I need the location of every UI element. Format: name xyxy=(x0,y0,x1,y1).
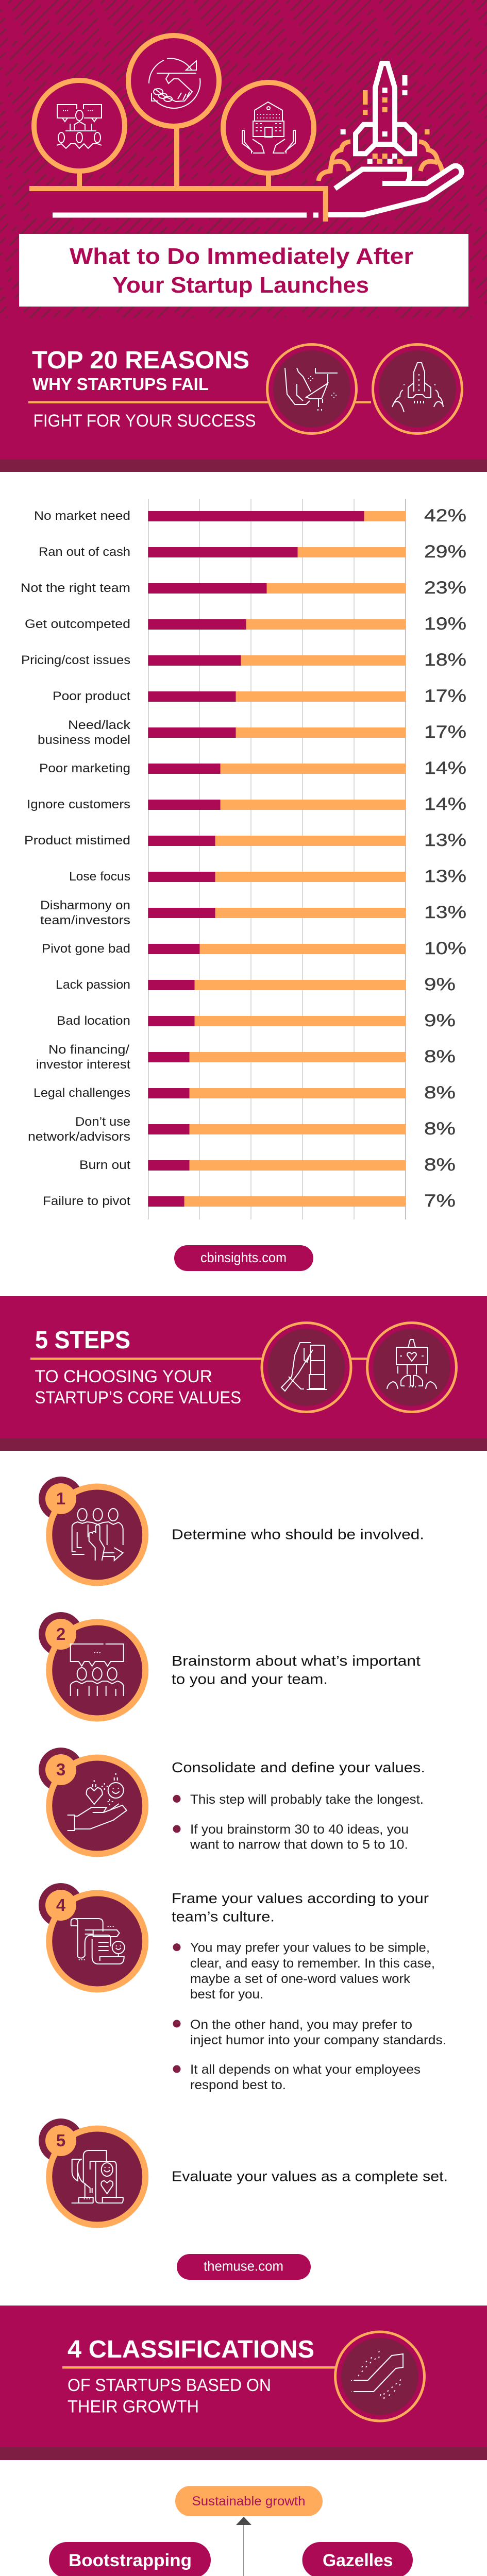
panel: top 20 reasons heading xyxy=(0,318,487,472)
bullet list: inject humor into your company standards. xyxy=(190,2033,446,2047)
row: Bad location 9% xyxy=(57,1011,456,1030)
row: No financing/investor interest 8% xyxy=(36,1043,456,1072)
row: Product mistimed 13%: 13% xyxy=(424,831,466,850)
title xyxy=(19,234,468,307)
row: Legal challenges 8% xyxy=(33,1083,456,1103)
row: Disharmony on team/investors 13% xyxy=(40,899,466,927)
step 1: determine who should be involved xyxy=(39,1477,424,1583)
row: Ran out of cash 29%: 29% xyxy=(424,542,466,562)
row: Get outcompeted 19%: Get outcompeted xyxy=(25,617,130,631)
row: Legal challenges 8%: Legal challenges xyxy=(33,1086,130,1100)
quadrant: bootstrapping xyxy=(47,2542,211,2576)
row: Disharmony on team/investors 13%: 13% xyxy=(424,903,466,922)
step 3: consolidate and define values xyxy=(39,1748,425,1854)
panel: 5 steps heading: TO CHOOSING YOUR xyxy=(35,1367,212,1386)
bullet list xyxy=(173,1941,446,2092)
icon: core values board with heart xyxy=(367,1323,457,1412)
row: No market need 42%: No market need xyxy=(34,509,130,523)
step 3: consolidate and define values: Consolidate and define your values. xyxy=(172,1759,425,1775)
row: Product mistimed 13% xyxy=(24,831,466,850)
row: Lack passion 9%: 9% xyxy=(424,975,456,994)
icon: team meeting with speech bubbles xyxy=(57,105,102,148)
row: Ignore customers 14% xyxy=(27,794,466,814)
source pill: cbinsights.com: cbinsights.com xyxy=(200,1250,287,1265)
row: Burn out 8%: Burn out xyxy=(79,1158,130,1172)
row: Poor marketing 14%: 14% xyxy=(424,758,466,778)
row: Failure to pivot 7% xyxy=(43,1191,456,1211)
panel: 4 classifications heading: OF STARTUPS BASED ON xyxy=(68,2376,271,2395)
icon: value scrolls xyxy=(71,1919,125,1964)
chart grid lines xyxy=(148,499,406,1219)
title: What to Do Immediately After xyxy=(70,244,413,269)
row: Lack passion 9%: Lack passion xyxy=(56,978,130,992)
row: Burn out 8% xyxy=(79,1155,456,1175)
source pill: cbinsights.com xyxy=(174,1245,313,1271)
row: Ignore customers 14%: Ignore customers xyxy=(27,798,130,811)
quadrant: gazelles: Gazelles xyxy=(323,2551,393,2570)
icon: trophy and scroll xyxy=(72,2150,123,2203)
row: Get outcompeted 19%: 19% xyxy=(424,614,466,634)
panel: 4 classifications heading: 4 CLASSIFICATIONS xyxy=(68,2336,314,2363)
row: No market need 42%: 42% xyxy=(424,506,466,526)
row: Poor marketing 14%: Poor marketing xyxy=(39,761,130,775)
bullet list: This step will probably take the longest. xyxy=(190,1792,424,1807)
bullet list: You may prefer your values to be simple, xyxy=(190,1941,430,1955)
illustration: three icon circles on a branching stem xyxy=(29,36,328,218)
row: Disharmony on team/investors 13%: team/investors xyxy=(40,913,130,927)
icon: team sharing one speech bubble xyxy=(71,1644,124,1696)
row: Poor marketing 14% xyxy=(39,758,466,778)
axis label: sustainable growth: Sustainable growth xyxy=(192,2494,305,2509)
step 2: brainstorm: to you and your team. xyxy=(172,1671,328,1687)
bullet list xyxy=(173,1792,424,1852)
bullet list: want to narrow that down to 5 to 10. xyxy=(190,1838,408,1852)
row: Not the right team 23%: 23% xyxy=(424,578,466,598)
icon: hand with pen xyxy=(267,344,357,434)
bar chart: top 20 reasons startups fail xyxy=(21,499,466,1219)
row: Failure to pivot 7%: 7% xyxy=(424,1191,456,1211)
bullet list: If you brainstorm 30 to 40 ideas, you xyxy=(190,1822,409,1837)
step 2: brainstorm: Brainstorm about what’s important xyxy=(172,1653,421,1669)
bullet list: respond best to. xyxy=(190,2078,286,2092)
row: Poor product 17% xyxy=(53,686,466,706)
row: No market need 42% xyxy=(34,506,466,526)
icon: upward growth arrow xyxy=(335,2332,425,2421)
step 4: frame values: 4 xyxy=(56,1895,66,1914)
icon: hand stacking blocks xyxy=(262,1323,351,1412)
row: Pivot gone bad 10%: Pivot gone bad xyxy=(42,942,130,956)
row: Pivot gone bad 10%: 10% xyxy=(424,939,466,958)
step 3: consolidate and define values: 3 xyxy=(56,1760,65,1779)
panel: 5 steps heading: 5 STEPS xyxy=(35,1327,130,1354)
row: Product mistimed 13%: Product mistimed xyxy=(24,834,130,848)
row: Not the right team 23% xyxy=(21,578,466,598)
step 5: evaluate values xyxy=(39,2119,448,2225)
row: Ran out of cash 29% xyxy=(39,542,466,562)
axis label: sustainable growth xyxy=(175,2486,323,2516)
title: Your Startup Launches xyxy=(112,273,369,298)
step 4: frame values xyxy=(39,1883,446,2092)
panel: top 20 reasons heading: WHY STARTUPS FAIL xyxy=(32,375,209,394)
row: Don't use network/advisors 8%: network/advisors xyxy=(28,1130,130,1144)
row: Lack passion 9% xyxy=(56,975,456,994)
step 1: determine who should be involved: Determine who should be involved. xyxy=(172,1526,424,1543)
row: Bad location 9%: Bad location xyxy=(57,1014,130,1028)
row: Pricing/cost issues 18% xyxy=(21,650,466,670)
icon: people raising a hand xyxy=(72,1509,123,1561)
row: Ran out of cash 29%: Ran out of cash xyxy=(39,545,130,559)
bullet list: best for you. xyxy=(190,1987,263,2002)
row: No financing/investor interest 8%: 8% xyxy=(424,1047,456,1066)
quadrant: bootstrapping: Bootstrapping xyxy=(69,2551,192,2570)
step 2: brainstorm: 2 xyxy=(56,1624,65,1643)
bullet list: maybe a set of one-word values work xyxy=(190,1972,411,1986)
quadrant: gazelles xyxy=(275,2542,440,2576)
rocket smoke clouds xyxy=(318,142,442,181)
icon: hand holding heart and smile xyxy=(68,1773,127,1831)
row: No financing/investor interest 8%: investor interest xyxy=(36,1058,130,1072)
row: Need/lack business model 17% xyxy=(38,718,466,747)
bullet list: clear, and easy to remember. In this case, xyxy=(190,1956,435,1971)
panel: top 20 reasons heading: TOP 20 REASONS xyxy=(32,347,249,374)
row: Need/lack business model 17%: Need/lack xyxy=(68,718,131,732)
row: Failure to pivot 7%: Failure to pivot xyxy=(43,1194,130,1208)
step 4: frame values: Frame your values according to your xyxy=(172,1890,429,1906)
icon: building held in two hands xyxy=(242,102,295,154)
icon: small rocket xyxy=(373,344,462,434)
panel: 4 classifications heading: THEIR GROWTH xyxy=(68,2397,199,2416)
source pill: themuse.com: themuse.com xyxy=(204,2259,283,2274)
icon: handshake in circular arrows xyxy=(149,59,200,108)
panel: 4 classifications heading xyxy=(0,2306,487,2460)
panel: striped header background xyxy=(0,0,487,318)
row: Pivot gone bad 10% xyxy=(42,939,466,958)
source pill: themuse.com xyxy=(177,2254,311,2280)
row: Poor product 17%: 17% xyxy=(424,686,466,706)
row: Pricing/cost issues 18%: Pricing/cost issues xyxy=(21,653,130,667)
step 5: evaluate values: 5 xyxy=(56,2131,65,2150)
bullet list: It all depends on what your employees xyxy=(190,2062,421,2077)
row: Bad location 9%: 9% xyxy=(424,1011,456,1030)
panel: top 20 reasons heading: FIGHT FOR YOUR SUCCESS xyxy=(33,411,256,431)
row: No financing/investor interest 8%: No financing/ xyxy=(48,1043,129,1057)
row: Lose focus 13% xyxy=(69,867,466,886)
row: Ignore customers 14%: 14% xyxy=(424,794,466,814)
row: Lose focus 13%: 13% xyxy=(424,867,466,886)
bullet list: On the other hand, you may prefer to xyxy=(190,2018,412,2032)
sparks and exhaust xyxy=(341,75,430,164)
step 5: evaluate values: Evaluate your values as a complete set. xyxy=(172,2168,448,2184)
row: Not the right team 23%: Not the right team xyxy=(21,581,130,595)
step 2: brainstorm xyxy=(39,1612,421,1719)
row: Lose focus 13%: Lose focus xyxy=(69,870,130,884)
row: Don't use network/advisors 8%: Don’t use xyxy=(75,1115,130,1129)
row: Get outcompeted 19% xyxy=(25,614,466,634)
step 4: frame values: team’s culture. xyxy=(172,1909,275,1925)
row: Disharmony on team/investors 13%: Disharmony on xyxy=(40,899,130,912)
row: Poor product 17%: Poor product xyxy=(53,689,130,703)
row: Need/lack business model 17%: 17% xyxy=(424,722,466,742)
row: Burn out 8%: 8% xyxy=(424,1155,456,1175)
row: Don't use network/advisors 8%: 8% xyxy=(424,1119,456,1139)
icon: rocket body xyxy=(356,63,414,154)
illustration: rocket launching from an open hand xyxy=(53,63,462,222)
panel: 5 steps heading: STARTUP’S CORE VALUES xyxy=(35,1388,241,1408)
panel: 5 steps heading xyxy=(0,1296,487,1451)
row: Legal challenges 8%: 8% xyxy=(424,1083,456,1103)
icon: open hand xyxy=(53,166,462,222)
row: Need/lack business model 17%: business model xyxy=(38,733,130,747)
row: Don't use network/advisors 8% xyxy=(28,1115,456,1144)
row: Pricing/cost issues 18%: 18% xyxy=(424,650,466,670)
diagram axes: growth versus employment xyxy=(155,2517,332,2576)
step 1: determine who should be involved: 1 xyxy=(56,1489,65,1508)
arrow: up xyxy=(236,2517,251,2525)
